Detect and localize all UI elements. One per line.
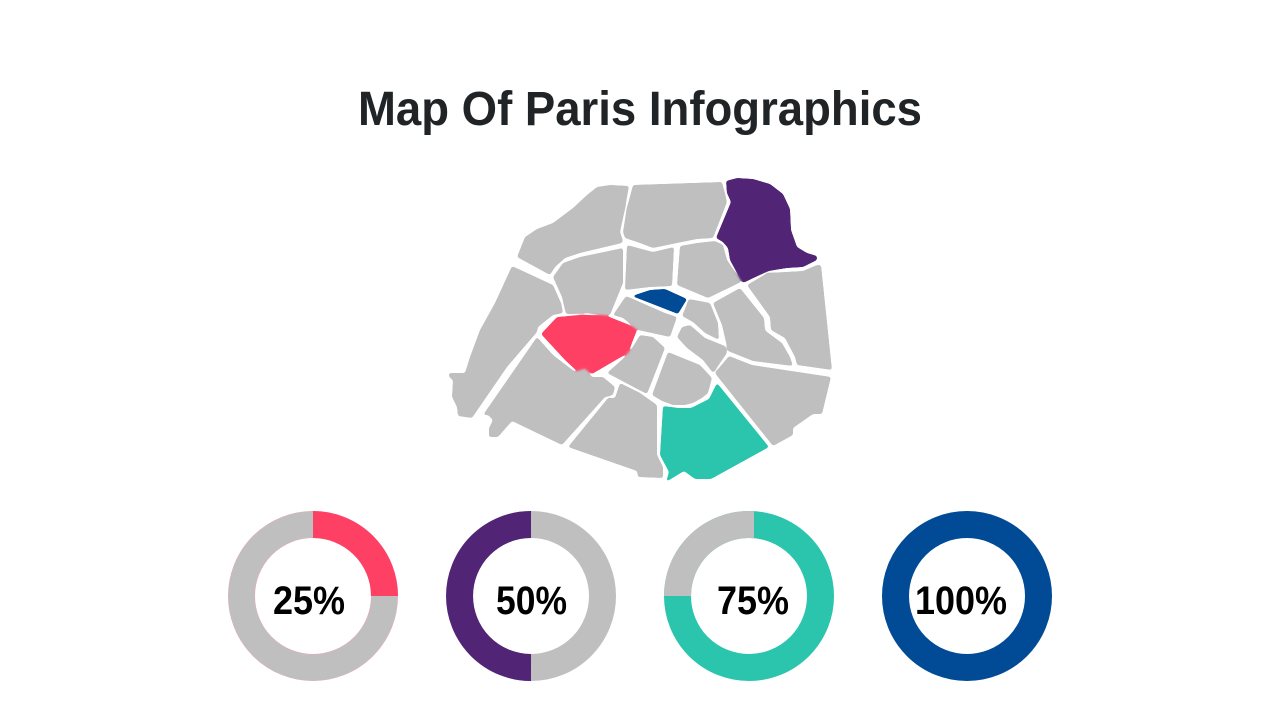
donut chart: 25% bbox=[242, 524, 384, 668]
district: fourth bbox=[677, 325, 727, 373]
district: west bbox=[449, 266, 563, 418]
district: north bbox=[623, 182, 727, 248]
donut chart: 75% bbox=[664, 511, 820, 668]
value: 75%: 75% bbox=[717, 579, 789, 623]
district: north-west bbox=[517, 185, 629, 275]
value: 50%: 50% bbox=[496, 579, 567, 623]
value: 25%: 25% bbox=[273, 579, 345, 623]
district: eighth bbox=[553, 248, 623, 315]
district: west highlighted red bbox=[541, 315, 637, 374]
district: below blue bbox=[613, 296, 677, 337]
district: centre highlighted blue bbox=[632, 289, 687, 314]
district: sixth bbox=[607, 335, 665, 394]
district: east centre bbox=[713, 288, 793, 366]
district: south bbox=[568, 383, 663, 478]
donut chart: 100% bbox=[896, 524, 1038, 668]
district: north centre bbox=[677, 241, 741, 298]
district: third bbox=[682, 299, 719, 340]
district: north-east highlighted purple bbox=[716, 178, 817, 283]
title: Map Of Paris Infographics bbox=[358, 83, 922, 136]
district: fifth bbox=[652, 352, 712, 405]
value: 100%: 100% bbox=[915, 579, 1007, 623]
district: east bbox=[747, 265, 832, 370]
map of Paris bbox=[449, 178, 832, 482]
donut chart: 50% bbox=[460, 524, 602, 668]
district: ninth bbox=[625, 245, 674, 290]
district: south highlighted teal bbox=[660, 383, 769, 482]
district: south-west bbox=[483, 337, 615, 445]
district: south-east bbox=[715, 356, 831, 446]
